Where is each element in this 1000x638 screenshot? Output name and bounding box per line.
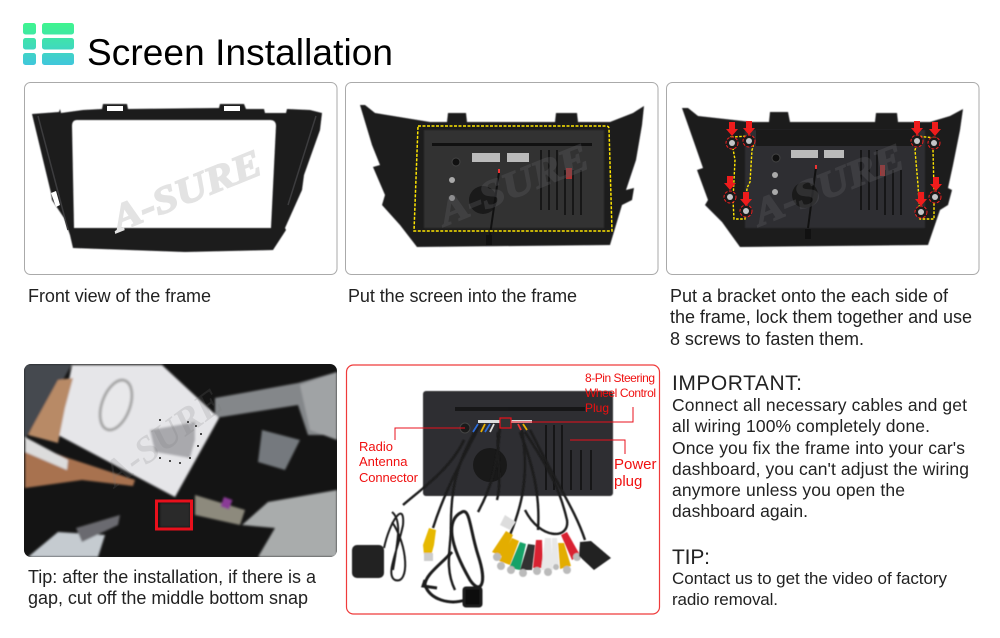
text block: tip: radio removal. bbox=[672, 590, 778, 609]
caption: tip snap bbox=[28, 567, 317, 608]
text block: tip: TIP: bbox=[672, 546, 710, 569]
watermark: A-SURE bbox=[94, 381, 231, 496]
arrows bbox=[724, 121, 942, 206]
colored wires bbox=[473, 424, 527, 432]
callout: power plug bbox=[614, 456, 657, 490]
caption: tip snap: Tip: after the installation, if there is a bbox=[28, 567, 317, 587]
cables bbox=[403, 425, 585, 590]
callout: radio antenna connector: Antenna bbox=[359, 454, 408, 469]
callout: power plug: Power bbox=[614, 456, 657, 473]
frame highlights bbox=[38, 116, 316, 230]
caption: screen into frame: Put the screen into the frame bbox=[348, 286, 577, 306]
connector: USB cables bbox=[423, 512, 483, 606]
metal perforations bbox=[159, 419, 202, 464]
panel: screen in frame bbox=[346, 82, 658, 274]
text block: important bbox=[672, 372, 969, 521]
text block: tip: Contact us to get the video of factory bbox=[672, 569, 948, 588]
screen rear bbox=[424, 130, 604, 228]
callout: 8-pin steering wheel control plug: Wheel Control bbox=[585, 386, 656, 400]
caption: front view: Front view of the frame bbox=[28, 286, 211, 306]
watermark: A-SURE bbox=[431, 136, 595, 235]
text block: tip bbox=[672, 546, 948, 609]
text block: important: all wiring 100% completely done. bbox=[672, 416, 930, 436]
frame rear with brackets bbox=[682, 108, 963, 247]
screws bbox=[724, 135, 941, 218]
callout: 8-pin steering wheel control plug: Plug bbox=[585, 401, 609, 415]
frame tab holes bbox=[51, 106, 240, 207]
bracket outlines bbox=[731, 136, 936, 219]
watermark: A-SURE bbox=[746, 136, 910, 235]
screw heads bbox=[727, 138, 938, 215]
connector: GPS antenna bbox=[352, 512, 405, 580]
panel: wiring diagram bbox=[346, 365, 660, 614]
callout: power plug: plug bbox=[614, 473, 642, 490]
callout lines bbox=[395, 407, 633, 454]
callout: radio antenna connector: Connector bbox=[359, 470, 419, 485]
caption: bracket step bbox=[670, 286, 972, 349]
screen rear bbox=[423, 391, 613, 496]
callout: radio antenna connector: Radio bbox=[359, 439, 393, 454]
callout: 8-pin steering wheel control plug: 8-Pin Steering bbox=[585, 371, 655, 385]
watermark: A-SURE bbox=[104, 142, 268, 241]
text block: important: anymore unless you open the bbox=[672, 480, 905, 500]
text block: important: IMPORTANT: bbox=[672, 372, 802, 395]
caption: bracket step: Put a bracket onto the each side of bbox=[670, 286, 949, 306]
panel: brackets and screws bbox=[666, 82, 979, 274]
icon: section list bbox=[23, 23, 74, 65]
frame rear bbox=[360, 105, 644, 247]
caption: tip snap: gap, cut off the middle bottom snap bbox=[28, 588, 308, 608]
photo: middle bottom snap bbox=[24, 364, 337, 557]
callout: radio antenna connector bbox=[359, 439, 419, 485]
text block: important: Once you fix the frame into your car's bbox=[672, 438, 965, 458]
red highlight box bbox=[156, 501, 192, 529]
connector: RCA bundle bbox=[492, 515, 611, 577]
8-pin highlight box bbox=[500, 418, 511, 428]
text block: important: dashboard, you can't adjust the wiring bbox=[672, 459, 969, 479]
caption: bracket step: the frame, lock them together and use bbox=[670, 307, 972, 327]
dashed screen outline bbox=[414, 126, 612, 231]
text block: important: dashboard again. bbox=[672, 501, 808, 521]
callout: 8-pin steering wheel control plug bbox=[585, 371, 656, 415]
connector: yellow RCA bbox=[423, 528, 436, 561]
caption: bracket step: 8 screws to fasten them. bbox=[670, 329, 864, 349]
text block: important: Connect all necessary cables and get bbox=[672, 395, 967, 415]
panel: front view of the frame bbox=[24, 82, 337, 274]
frame front bbox=[32, 104, 322, 252]
title: Screen Installation bbox=[87, 32, 393, 73]
